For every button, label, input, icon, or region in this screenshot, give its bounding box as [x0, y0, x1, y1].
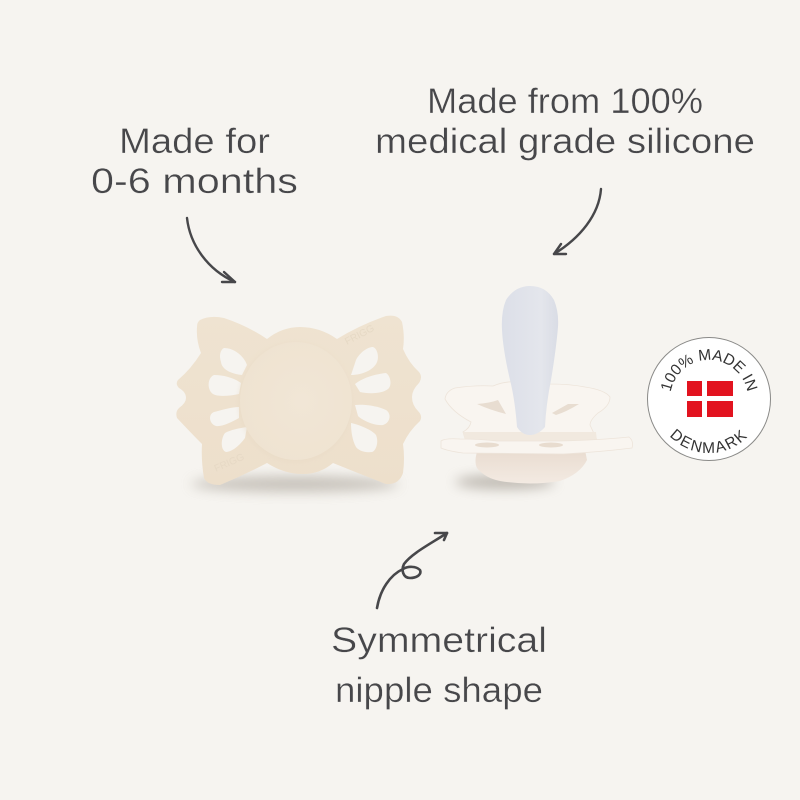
pacifier button rim [238, 342, 352, 462]
side lower body shade [463, 432, 597, 443]
text: symmetrical nipple shape [331, 621, 547, 710]
side upper shield [445, 382, 610, 442]
side lower flange [441, 437, 633, 454]
arrow: to silicone nipple [554, 189, 601, 254]
text: made for 0-6 months: Made for [119, 122, 270, 161]
text: made from medical grade silicone: Made from 100% [427, 82, 703, 121]
pacifier front view [176, 316, 421, 492]
text: symmetrical nipple shape: nipple shape [335, 671, 543, 710]
arrow: to symmetrical nipple [377, 533, 447, 608]
badge: 100% made in Denmark [647, 337, 771, 461]
flange tints [475, 442, 563, 448]
text: made for 0-6 months: 0-6 months [91, 162, 298, 201]
text: symmetrical nipple shape: Symmetrical [331, 621, 547, 660]
side shield openings [477, 400, 579, 415]
pacifier shield [176, 316, 421, 485]
arrow: to front pacifier [187, 218, 235, 282]
pacifier holes [209, 347, 390, 452]
brand marks: FRIGG [343, 323, 377, 348]
text: made for 0-6 months [91, 122, 298, 201]
pacifier button [240, 342, 352, 460]
badge text top: 100% MADE IN [661, 349, 758, 391]
badge text bottom: DENMARK [670, 428, 748, 453]
text: made from medical grade silicone: medical grade silicone [375, 122, 755, 161]
brand marks: FRIGG [213, 452, 246, 475]
icon: Danish flag [687, 381, 733, 417]
side shadow [455, 475, 555, 489]
side button [476, 450, 587, 484]
pacifier shadow [191, 476, 399, 492]
text: made from medical grade silicone [375, 82, 755, 161]
brand marks [213, 323, 377, 475]
silicone nipple [502, 286, 558, 435]
pacifier side view [441, 286, 633, 489]
